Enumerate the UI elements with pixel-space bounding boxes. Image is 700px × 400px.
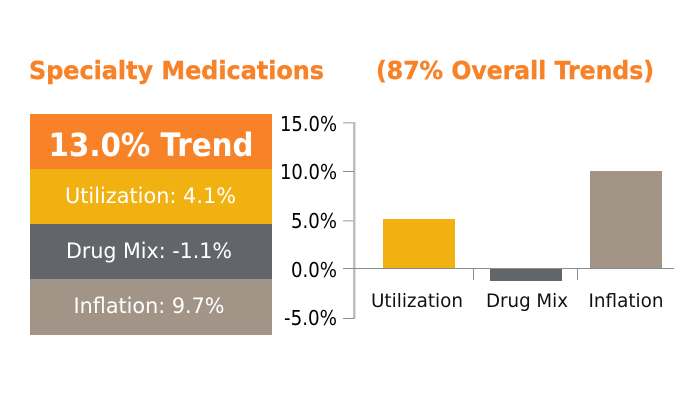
inflation row xyxy=(30,279,272,335)
bar: utilization xyxy=(383,219,455,268)
x axis labels: Drug Mix xyxy=(486,290,568,312)
title: specialty medications: Specialty Medications xyxy=(29,56,324,85)
total trend row xyxy=(30,114,272,169)
y axis labels: 5.0% xyxy=(291,209,337,233)
y axis labels: -5.0% xyxy=(284,306,337,330)
y axis labels: 10.0% xyxy=(280,160,337,184)
y axis labels xyxy=(280,112,337,330)
x axis labels xyxy=(371,290,664,312)
utilization row xyxy=(30,169,272,224)
panel: trend summary xyxy=(30,114,272,335)
bar: inflation xyxy=(590,171,662,268)
x axis labels: Inflation xyxy=(588,290,664,312)
utilization row: Utilization: 4.1% xyxy=(65,184,236,208)
inflation row: Inflation: 9.7% xyxy=(74,294,224,318)
drug mix row xyxy=(30,224,272,279)
y axis labels: 0.0% xyxy=(291,258,337,282)
total trend row: 13.0% Trend xyxy=(48,126,254,164)
drug mix row: Drug Mix: -1.1% xyxy=(66,239,232,263)
x axis labels: Utilization xyxy=(371,290,463,312)
bar chart xyxy=(280,112,674,330)
y axis labels: 15.0% xyxy=(280,112,337,136)
zero line with category ticks xyxy=(343,268,674,280)
title: overall trends: (87% Overall Trends) xyxy=(376,56,654,85)
y axis xyxy=(343,122,356,319)
bar: drug mix xyxy=(490,268,562,281)
